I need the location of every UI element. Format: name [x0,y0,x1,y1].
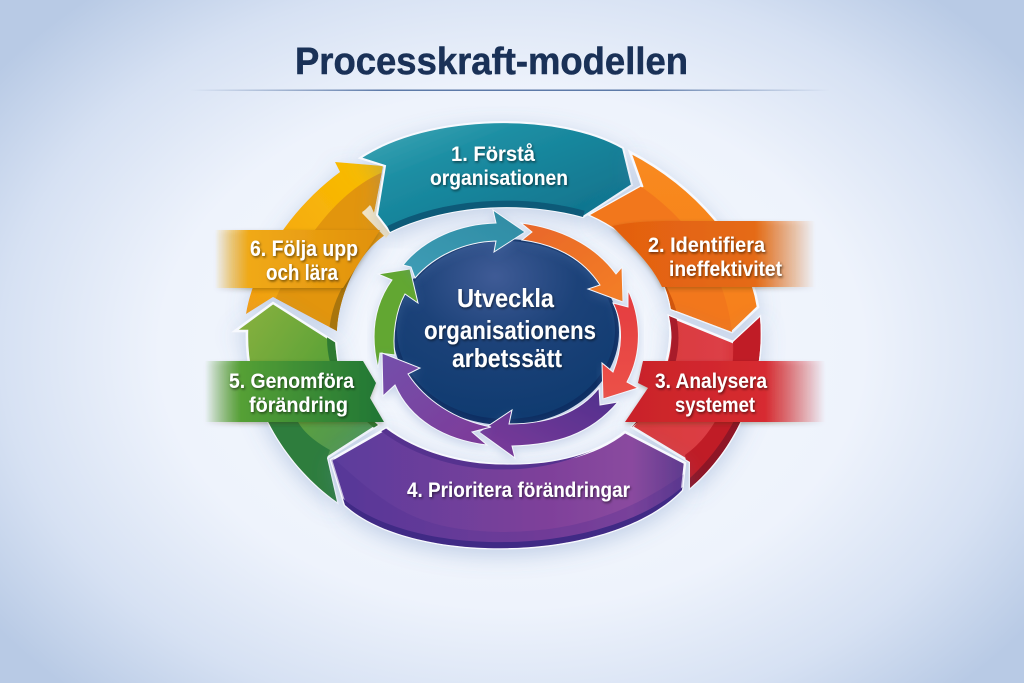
label: step 4: 4. Prioritera förändringar [407,479,630,502]
ring segment: step 1 teal [360,122,632,232]
ring segment: step 5 green arrow [232,302,382,510]
banner: step 3 [625,361,825,422]
label: step 3: systemet [675,394,755,417]
hub text: Utveckla [457,283,554,313]
label: step 6: 6. Följa upp [250,236,358,261]
banner: step 6 [215,230,380,288]
hub text: organisationens [424,315,596,345]
label: step 2: 2. Identifiera [648,234,765,257]
label: step 5: 5. Genomföra [229,370,354,393]
label: step 6 [250,236,358,285]
label: step 1: organisationen [430,167,568,190]
inner arrow: teal [403,210,525,278]
banner: step 5 [205,361,384,422]
label: step 5 [229,370,354,417]
hub text: arbetssätt [452,343,562,373]
label: step 2 [648,234,782,281]
hub text [424,283,596,373]
label: step 3 [655,370,767,417]
inner arrow: red [602,290,638,399]
label: step 5: förändring [249,394,348,417]
ring segment: step 3 red [627,314,772,496]
label: step 3: 3. Analysera [655,370,767,393]
label: step 1 [430,143,568,190]
ring segment: step 2 orange [588,150,767,340]
cream join at yellow arrow [362,165,391,238]
label: step 1: 1. Förstå [451,143,535,166]
label: step 2: ineffektivitet [669,258,782,281]
banner: step 2 [612,221,815,287]
ring segment: step 4 purple [326,427,695,566]
title: Processkraft-modellen [295,41,688,83]
inner arrow: green [374,269,418,368]
ring segment: step 6 yellow arrow [241,160,388,340]
outer process ring [235,122,761,570]
inner arrow: orange [521,223,623,302]
label: step 6: och lära [266,260,339,285]
inner arrow: purple right [479,388,618,458]
central hub [393,239,619,425]
inner arrow: purple left [382,353,491,445]
inner cycle arrows [374,210,638,458]
